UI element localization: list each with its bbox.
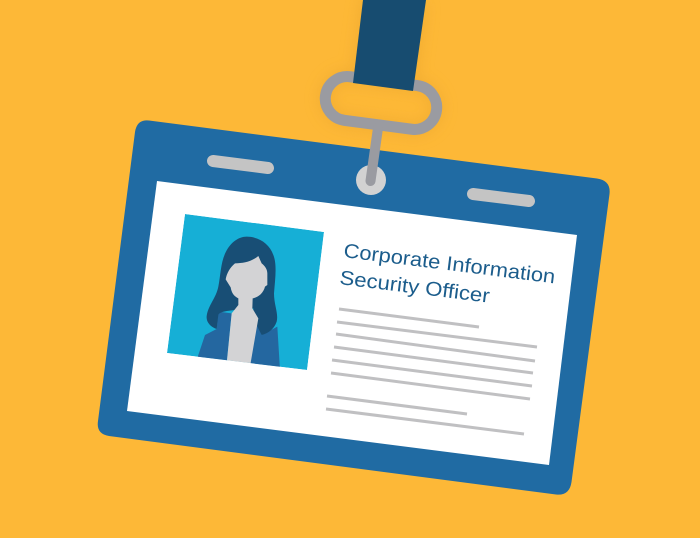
- lanyard assembly shadow: [323, 0, 439, 132]
- job title: [338, 240, 556, 308]
- photo background: [167, 214, 324, 370]
- portrait: [197, 237, 280, 370]
- jacket: [197, 312, 280, 370]
- right slot: [473, 194, 529, 201]
- title line 1: Corporate Information: [342, 240, 556, 288]
- ID badge card: [98, 120, 610, 495]
- left slot: [213, 161, 268, 168]
- clip stem: [370, 128, 378, 181]
- lanyard strap: [353, 0, 426, 91]
- white card insert: [127, 181, 577, 465]
- photo: [167, 214, 324, 370]
- title line 2: Security Officer: [338, 267, 491, 308]
- card holder: [98, 120, 610, 495]
- placeholder text lines: [326, 309, 537, 434]
- hair: [207, 237, 277, 335]
- face and body: [226, 256, 267, 367]
- clip ring: [323, 74, 439, 132]
- eyelet: [356, 165, 386, 195]
